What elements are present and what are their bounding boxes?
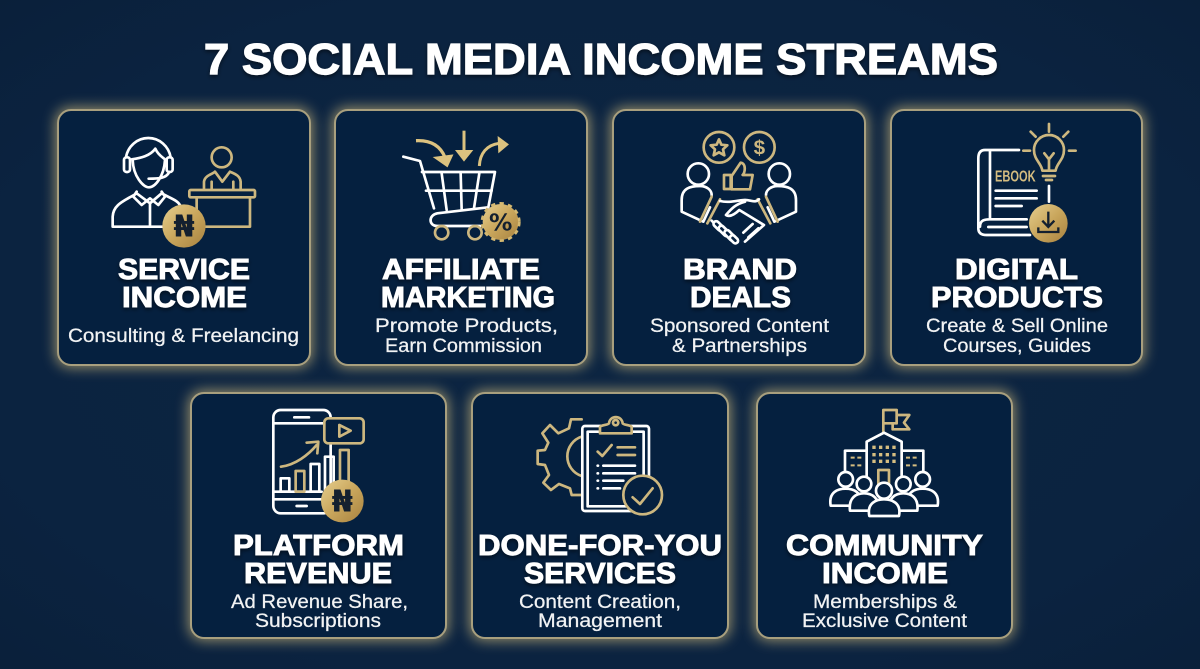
subtitle: Management [538, 611, 663, 632]
subtitle [519, 592, 681, 632]
panel: platform revenue [189, 391, 448, 640]
icon: phone with growth chart and naira coin: ₦ [332, 485, 353, 520]
panel: brand deals [611, 108, 867, 367]
heading: INCOME [122, 282, 247, 314]
subtitle [231, 592, 408, 632]
heading [233, 530, 404, 590]
icon: handshake with thumbs up, star and dollar: $ [754, 137, 766, 160]
heading: PRODUCTS [931, 282, 1103, 314]
icon: support agent and desk with naira coin [113, 138, 255, 248]
subtitle: Exclusive Content [802, 611, 968, 632]
subtitle: Consulting & Freelancing [68, 326, 299, 347]
heading: BRAND [683, 254, 797, 286]
heading: AFFILIATE [382, 254, 540, 286]
panel: service income [56, 108, 312, 367]
subtitle: Ad Revenue Share, [231, 592, 408, 613]
icon: ebook with light bulb and download [978, 124, 1076, 243]
subtitle: Courses, Guides [943, 336, 1091, 357]
heading: REVENUE [244, 558, 392, 590]
subtitle: Content Creation, [519, 592, 681, 613]
heading: SERVICES [524, 558, 676, 590]
subtitle: Promote Products, [375, 316, 558, 337]
heading [478, 530, 722, 590]
heading [381, 254, 555, 314]
panel: community income [755, 391, 1014, 640]
subtitle [802, 592, 968, 632]
panel: affiliate marketing [333, 108, 589, 367]
heading: DEALS [690, 282, 791, 314]
subtitle: & Partnerships [672, 336, 807, 357]
subtitle: Subscriptions [255, 611, 381, 632]
heading: PLATFORM [233, 530, 404, 562]
heading [683, 254, 797, 314]
icon: ebook with light bulb and download: EBOOK [995, 169, 1036, 186]
heading: DONE-FOR-YOU [478, 530, 722, 562]
panel: digital products [889, 108, 1144, 367]
icon: handshake with thumbs up, star and dollar [682, 132, 796, 245]
heading: SERVICE [118, 254, 250, 286]
subtitle [926, 316, 1108, 357]
icon: support agent and desk with naira coin: ₦ [173, 210, 195, 245]
subtitle: Memberships & [813, 592, 957, 613]
heading: MARKETING [381, 282, 555, 314]
icon: shopping cart with arrows and percent badge: % [489, 209, 512, 237]
subtitle: Create & Sell Online [926, 316, 1108, 337]
icon: shopping cart with arrows and percent badge [403, 131, 519, 241]
title: 7 SOCIAL MEDIA INCOME STREAMS [204, 35, 998, 84]
heading: DIGITAL [955, 254, 1078, 286]
subtitle [650, 316, 830, 357]
subtitle: Sponsored Content [650, 316, 830, 337]
heading [931, 254, 1103, 314]
panel: done-for-you services [470, 391, 730, 640]
subtitle [375, 316, 558, 357]
subtitle: Earn Commission [385, 336, 542, 357]
icon: building with flag and crowd [830, 410, 938, 516]
heading: INCOME [822, 558, 948, 590]
icon: phone with growth chart and naira coin [273, 410, 364, 522]
heading [118, 254, 250, 314]
icon: gear and clipboard checklist [538, 417, 662, 514]
heading: COMMUNITY [786, 530, 983, 562]
heading [786, 530, 983, 590]
